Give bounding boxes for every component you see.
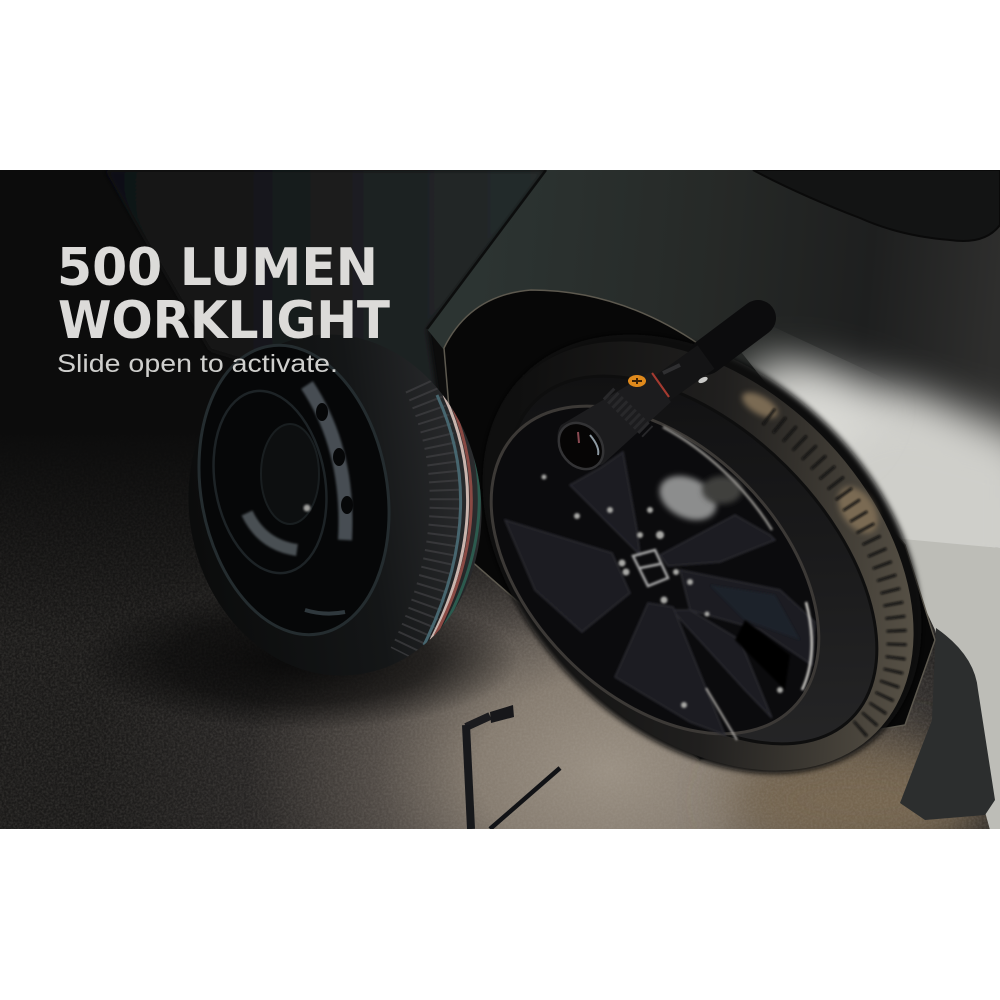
spare tire tread [405, 385, 446, 655]
background [0, 170, 544, 400]
lug wrench [466, 705, 560, 829]
spare wheel holes [316, 403, 353, 514]
spare wheel rim [198, 344, 390, 636]
orange logo [628, 375, 646, 387]
lens [558, 422, 604, 470]
sidewall [604, 375, 878, 746]
spare inner ring [212, 390, 328, 574]
spoke window tint [716, 588, 796, 637]
wheel arch [444, 290, 935, 760]
heading: 500 LUMEN [57, 238, 378, 298]
rim highlights [663, 427, 812, 740]
clip glint [698, 376, 708, 384]
rim spokes [505, 452, 815, 735]
wheel hub badge [633, 550, 668, 586]
alloy rim [490, 404, 820, 736]
flashlight [550, 318, 758, 478]
subheading: Slide open to activate. [57, 350, 338, 378]
wheel bolts and droplets [542, 474, 783, 708]
mudflap [900, 628, 995, 820]
front bumper [902, 540, 1000, 829]
tread grooves [768, 416, 897, 736]
ground [0, 478, 990, 829]
main tire [490, 342, 914, 770]
wheel hole [735, 620, 790, 690]
spare tire colour stripes [424, 390, 479, 645]
tread dirt [738, 387, 886, 540]
spare hub [261, 424, 319, 524]
knurled ring [608, 393, 648, 432]
photo panel: flashlight lighting a car wheel [0, 170, 1000, 829]
spare tire [188, 335, 482, 668]
heading: WORKLIGHT [58, 291, 390, 351]
spare lit patches [247, 513, 297, 550]
body panel seam [427, 170, 546, 329]
spare wheel lit band [307, 385, 346, 540]
brake disc [656, 472, 744, 524]
window recess [753, 170, 1000, 241]
light pool on fender [742, 328, 1000, 548]
upper car body [427, 170, 1000, 442]
heading [57, 238, 390, 351]
wheel well shadow [505, 340, 925, 778]
spare tire shadow [112, 608, 508, 724]
car door panel [111, 170, 544, 388]
